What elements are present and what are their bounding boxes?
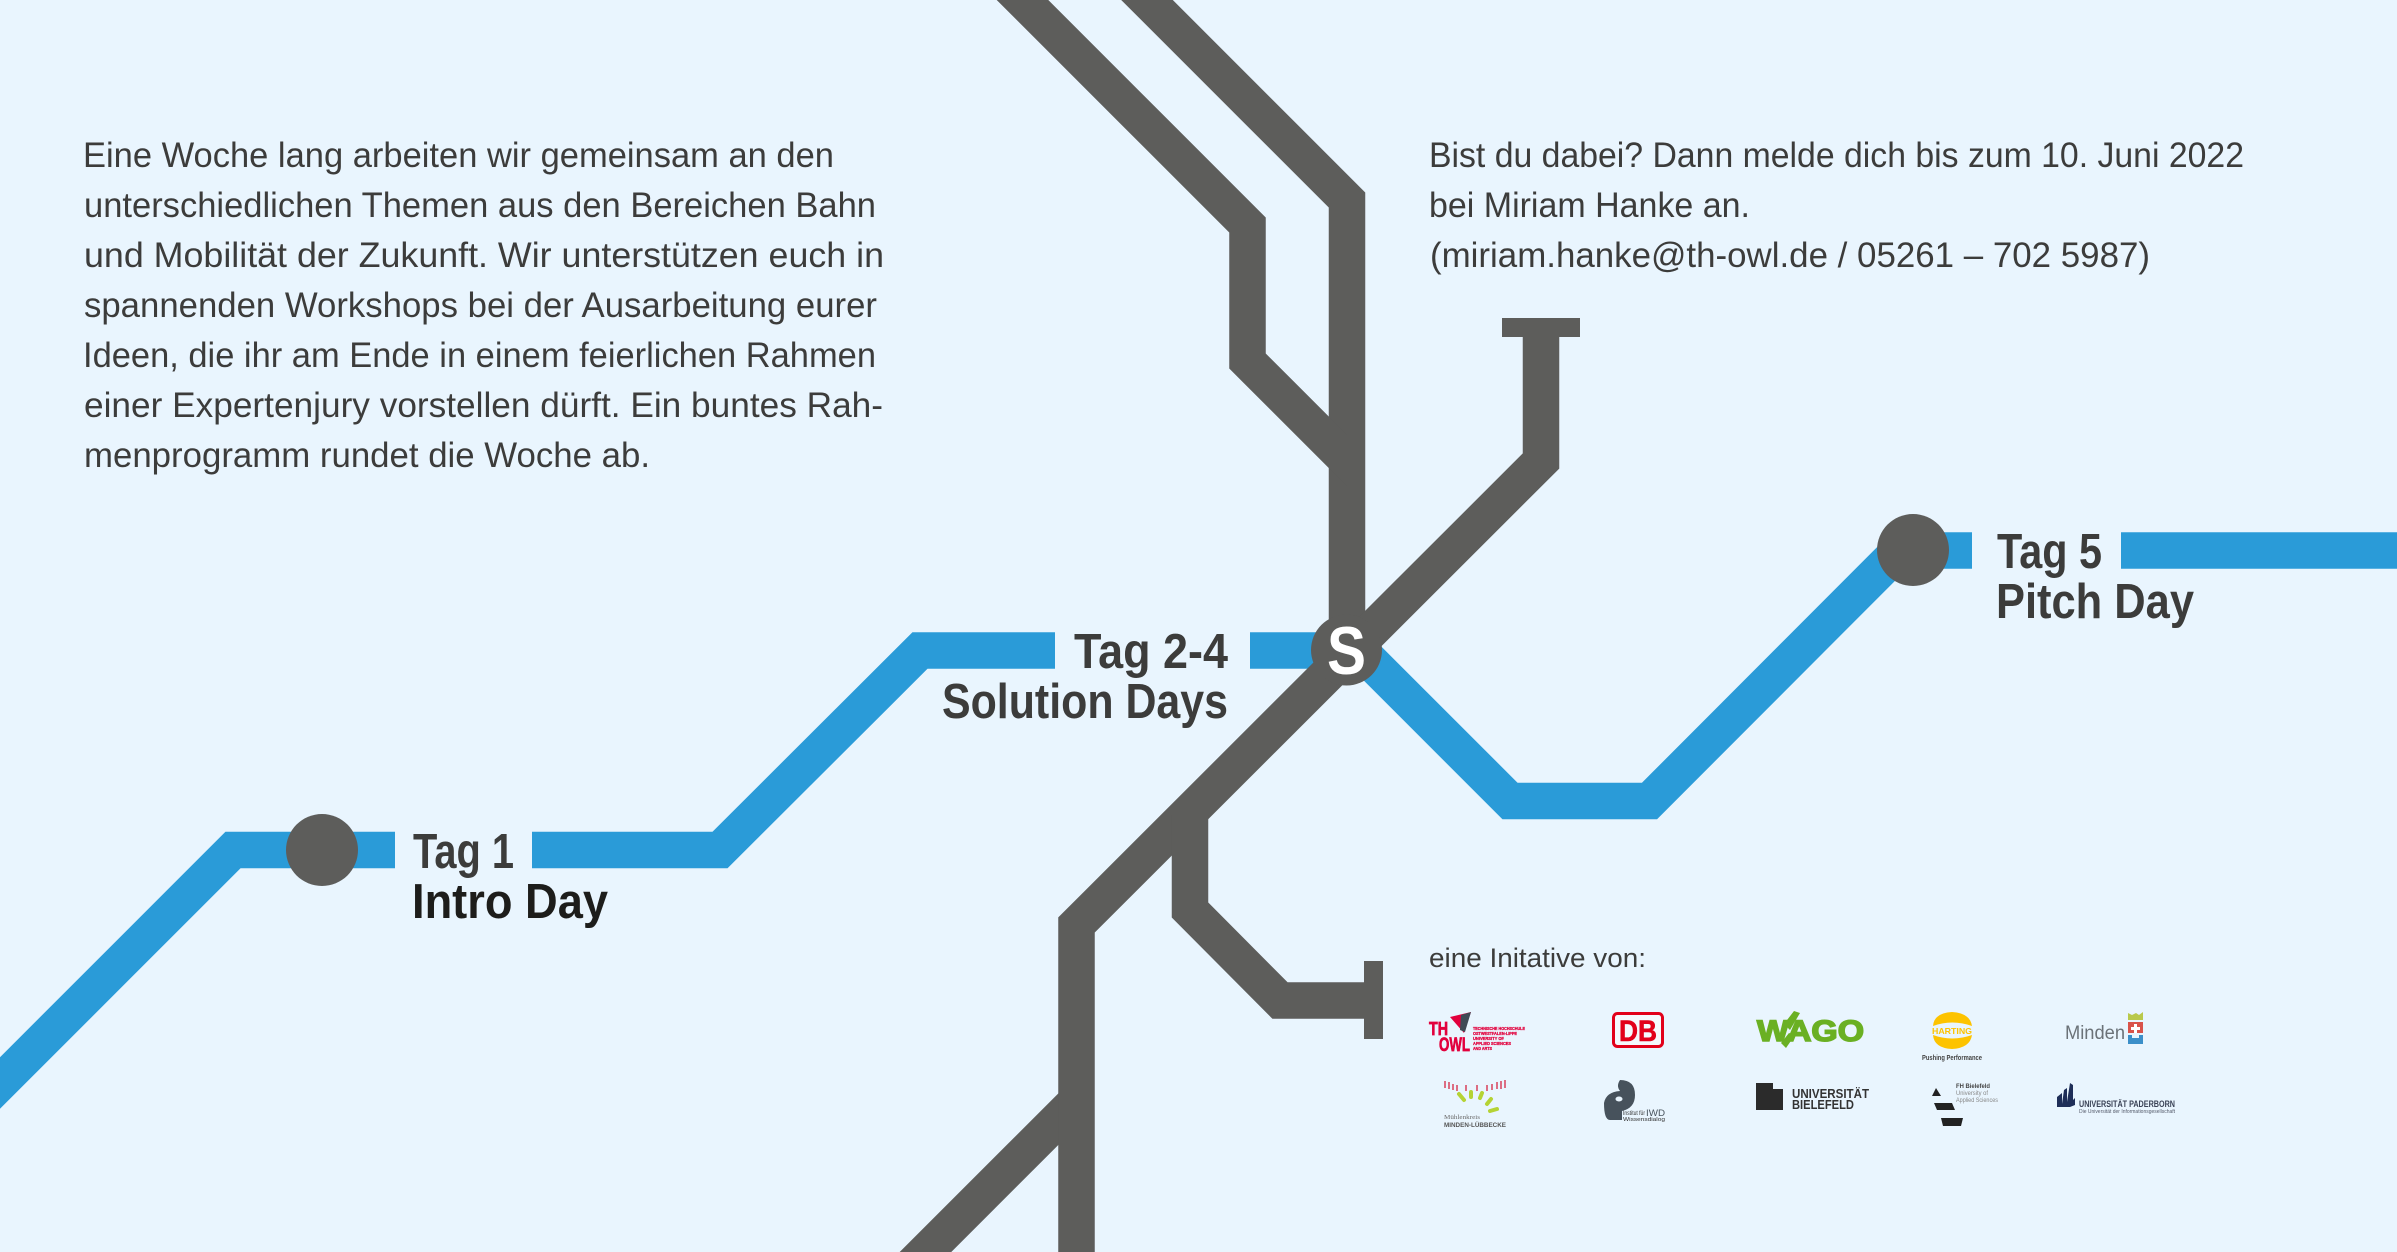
logo: Universität Paderborn — [2057, 1083, 2176, 1115]
logo: Minden: Minden — [2065, 1023, 2125, 1044]
text block: registration: Bist du dabei? Dann melde dich bis zum 10. Juni 2022 — [1429, 136, 2244, 175]
text block: registration: bei Miriam Hanke an. — [1429, 186, 1750, 225]
logo: TH OWL: OSTWESTFALEN-LIPPE — [1473, 1031, 1517, 1036]
logo: Universität Bielefeld: BIELEFELD — [1792, 1097, 1854, 1112]
text block: intro — [83, 136, 884, 475]
logo: Mühlenkreis Minden-Lübbecke: MINDEN-LÜBBECKE — [1444, 1120, 1507, 1129]
text block: intro: spannenden Workshops bei der Ausarbeitung eurer — [84, 286, 877, 325]
logo: Universität Bielefeld — [1756, 1083, 1869, 1112]
label: Tag 2-4 Solution Days: Tag 2-4 — [1074, 625, 1228, 679]
logo: Universität Paderborn: Die Universität der Informationsgesellschaft — [2079, 1109, 2176, 1115]
logo: FH Bielefeld: FH Bielefeld — [1956, 1083, 1990, 1090]
logo: FH Bielefeld: Applied Sciences — [1956, 1098, 1998, 1104]
logo: FH Bielefeld — [1932, 1083, 1998, 1126]
logo: Institut für IWD: Wissensdialog — [1623, 1117, 1665, 1123]
text block: intro: menprogramm rundet die Woche ab. — [84, 436, 650, 475]
text block: intro: einer Expertenjury vorstellen dürft. Ein buntes Rah- — [84, 386, 883, 425]
text block: registration — [1429, 136, 2244, 275]
text block: registration: (miriam.hanke@th-owl.de / 05261 – 702 5987) — [1430, 236, 2150, 275]
station: Tag 5 — [1877, 514, 1949, 586]
text block: intro: unterschiedlichen Themen aus den Bereichen Bahn — [84, 186, 876, 225]
logo: WAGO: WAGO — [1757, 1015, 1864, 1048]
logo: Institut für IWD: Institut für — [1623, 1111, 1645, 1117]
logo: Minden — [2065, 1012, 2143, 1044]
rail end cap: top — [1502, 318, 1580, 337]
logo: Institut für IWD: IWD — [1646, 1108, 1666, 1118]
logo: DB: DB — [1619, 1015, 1657, 1048]
rail end cap: lower — [1364, 961, 1383, 1039]
label: Tag 2-4 Solution Days: Solution Days — [942, 675, 1228, 729]
grey rail network — [900, 0, 1541, 1252]
label: Tag 1 Intro Day: Intro Day — [412, 875, 608, 929]
logo: HARTING — [1922, 1012, 1982, 1062]
logo: TH OWL: TH — [1429, 1019, 1448, 1039]
blue line: Tag 1 to Tag 2-4 — [0, 650, 1055, 1109]
logo: TH OWL: UNIVERSITY OF — [1473, 1036, 1504, 1041]
text block: intro: Eine Woche lang arbeiten wir gemeinsam an den — [83, 136, 834, 175]
logo: Universität Paderborn: UNIVERSITÄT PADERBORN — [2079, 1099, 2175, 1110]
station: S — [1311, 613, 1382, 689]
text block: intro: Ideen, die ihr am Ende in einem feierlichen Rahmen — [83, 336, 876, 375]
logo: HARTING: Pushing Performance — [1922, 1053, 1982, 1062]
station: Tag 1 — [286, 814, 358, 886]
text block: intro: und Mobilität der Zukunft. Wir unterstützen euch in — [84, 236, 884, 275]
logo: Universität Bielefeld: UNIVERSITÄT — [1792, 1086, 1869, 1101]
logo: Institut für IWD — [1604, 1080, 1666, 1123]
label: Tag 1 Intro Day: Tag 1 — [413, 825, 514, 879]
logo: TH OWL: APPLIED SCIENCES — [1473, 1041, 1511, 1046]
label: Tag 1 Intro Day — [412, 825, 608, 929]
label: Tag 5 Pitch Day: Pitch Day — [1996, 575, 2194, 629]
label: Tag 5 Pitch Day: Tag 5 — [1997, 525, 2102, 579]
label: Tag 2-4 Solution Days — [942, 625, 1228, 729]
heading: initiative: eine Initative von: — [1429, 943, 1646, 973]
logo: TH OWL: TECHNISCHE HOCHSCHULE — [1473, 1026, 1525, 1031]
label: Tag 5 Pitch Day — [1996, 525, 2194, 629]
logo: TH OWL: AND ARTS — [1473, 1046, 1492, 1051]
logo: Mühlenkreis Minden-Lübbecke: Mühlenkreis — [1444, 1114, 1481, 1121]
logo: TH OWL — [1429, 1012, 1525, 1056]
station: S: S — [1327, 613, 1366, 689]
blue line: S station to Tag 5 and beyond — [1250, 550, 2397, 801]
logo: HARTING: HARTING — [1932, 1026, 1972, 1036]
logo: TH OWL: OWL — [1439, 1035, 1470, 1056]
logo: Mühlenkreis Minden-Lübbecke — [1444, 1080, 1507, 1129]
logo: FH Bielefeld: University of — [1956, 1091, 1988, 1097]
